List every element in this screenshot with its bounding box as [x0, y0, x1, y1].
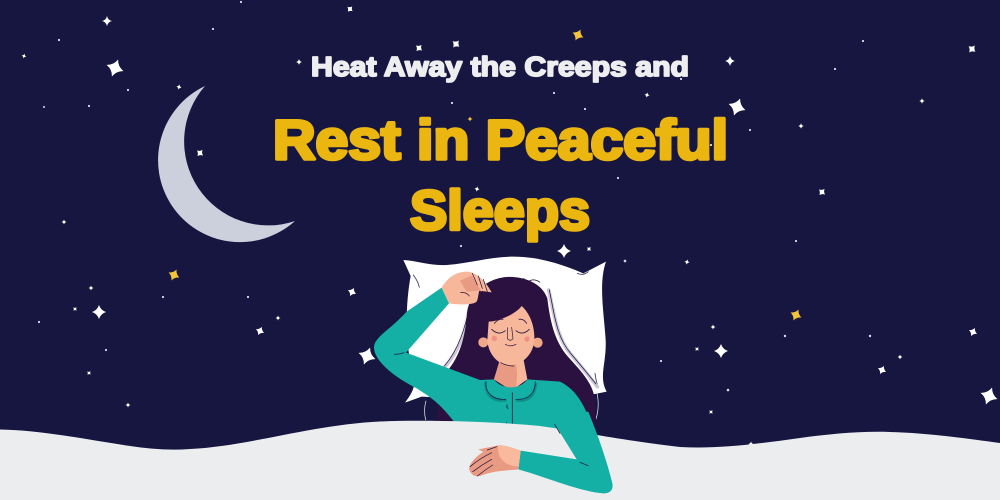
hair outline behind body — [425, 392, 598, 423]
blanket — [0, 421, 1000, 500]
face — [487, 306, 534, 365]
neck — [494, 358, 527, 391]
collar shadow — [484, 382, 537, 402]
cheeks — [492, 336, 497, 341]
collar and button line — [394, 353, 535, 427]
crescent moon — [158, 86, 295, 242]
hair — [437, 277, 597, 427]
pillow crease marks — [413, 272, 598, 387]
heading: Rest in Peaceful: Rest in Peaceful — [273, 108, 728, 171]
heading: Heat Away the Creeps and: Heat Away the Creeps and — [311, 51, 689, 82]
stray hair — [523, 278, 540, 282]
ears — [478, 337, 488, 347]
heading: Sleeps: Sleeps — [410, 178, 590, 242]
sleeping woman behind blanket — [374, 257, 607, 453]
pillow — [403, 257, 607, 403]
raised hand — [442, 272, 492, 304]
green pajama torso and raised arm — [374, 288, 593, 453]
facial features — [492, 319, 529, 366]
arm and hands over blanket — [442, 272, 613, 493]
sleeve over blanket — [518, 412, 613, 493]
hair shadow on pillow — [444, 290, 597, 387]
lower hand — [469, 445, 521, 476]
gold stars — [166, 27, 804, 323]
